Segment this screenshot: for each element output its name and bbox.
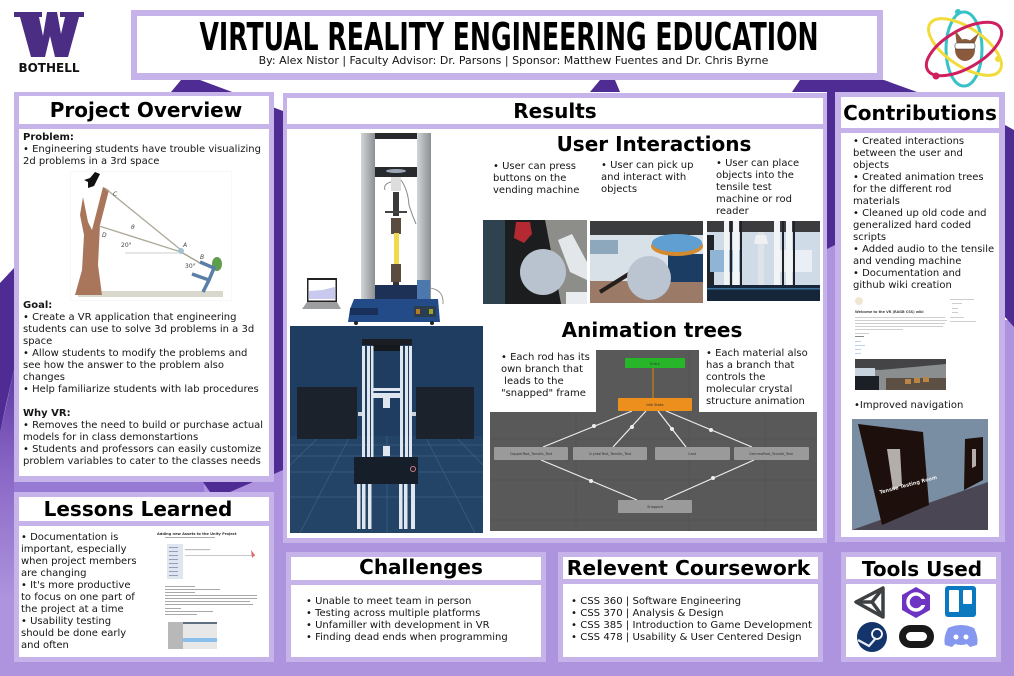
- diagram: animator state machine: GammaRod_Tensile_Test: [749, 452, 794, 456]
- panel: lessons learned: [14, 492, 274, 662]
- photo: pressing vending button: [483, 220, 587, 304]
- figure: tree statics problem: C: [113, 191, 118, 198]
- text: user can pick up: • User can pick up and interact with objects: [601, 160, 693, 195]
- screenshot: github wiki: [855, 297, 976, 390]
- text: goal: Goal: • Create a VR application that engineering students can use to solve 3d problems in a 3d space • Allow students to modify the problems and see how the answer to the problem also changes • Help familiarize students with lab procedures: [23, 300, 259, 395]
- icon: steam: [857, 622, 887, 652]
- title panel: [131, 10, 883, 80]
- text: each material: • Each material also has a branch that controls the molecular crystal structure animation: [706, 348, 808, 407]
- logo: atom bunny: [924, 9, 1004, 88]
- figure: tree statics problem: 20°: [121, 242, 132, 249]
- heading: results: Results: [513, 99, 597, 123]
- diagram: animator state machine: Idle State: [646, 403, 664, 407]
- heading: challenges: [291, 557, 541, 580]
- heading: contributions: Contributions: [843, 101, 997, 125]
- text: user can place objects: • User can place objects into the tensile test machine or rod reader: [716, 158, 799, 217]
- figure: tree statics problem: A: [182, 242, 187, 249]
- text: user can press buttons: • User can press buttons on the vending machine: [493, 161, 579, 196]
- diagram: animator state machine: Entry: [650, 362, 661, 366]
- text: each rod: • Each rod has its own branch that leads to the "snapped" frame: [501, 352, 590, 399]
- icon: W mark: [14, 12, 84, 57]
- screenshot: 3D machine model: [290, 326, 483, 533]
- panel: project overview: [14, 92, 274, 482]
- panel: contributions: [835, 92, 1005, 542]
- heading: project overview: [19, 96, 269, 124]
- heading: lessons learned: Lessons Learned: [44, 497, 232, 521]
- text: lessons: • Documentation is important, especially when project members are changing • It's more productive to focus on one part of the project at a time • Usability testing should be done early and often: [21, 532, 137, 651]
- figure: tree statics problem: [75, 172, 223, 297]
- text: contribution list: • Created interactions between the user and objects • Created animation trees for the different rod materials • Cleaned up old code and generalized hard coded scripts • Added audio to the tensile and vending machine • Documentation and github wiki creation: [853, 136, 994, 291]
- text: why VR: Why VR: • Removes the need to build or purchase actual models for in class demonstartions • Students and professors can easily customize problem variables to cater to the classes needs: [23, 408, 263, 467]
- figure: tree statics problem: B: [200, 254, 204, 261]
- text: problem: Problem: • Engineering students have trouble visualizing 2d problems in a 3rd space: [23, 132, 261, 167]
- diagram: animator state machine: [490, 350, 817, 531]
- logo wordmark: BOTHELL: [18, 61, 80, 75]
- subtitle: credits: By: Alex Nistor | Faculty Advisor: Dr. Parsons | Sponsor: Matthew Fuentes and Dr. Chris Byrne: [259, 54, 768, 67]
- heading: animation trees: Animation trees: [562, 318, 742, 342]
- text: challenges list: • Unable to meet team in person • Testing across multiple platforms • Unfamiller with development in VR • Finding dead ends when programming: [306, 596, 508, 643]
- figure: tree statics problem: D: [102, 232, 107, 239]
- screenshot: tensile testing room door: [852, 419, 988, 530]
- logo: UW Bothell: [14, 12, 84, 75]
- panel: relevent coursework: [558, 552, 823, 662]
- icon: C sharp: [902, 587, 930, 618]
- icon: unity: [856, 588, 883, 617]
- title: VIRTUAL REALITY ENGINEERING EDUCATION: [199, 15, 819, 59]
- heading: challenges: Challenges: [359, 555, 483, 579]
- text: coursework list: • CSS 360 | Software Engineering • CSS 370 | Analysis & Design • CSS 385 | Introduction to Game Development • CSS 478 | Usability & User Centered Design: [571, 596, 812, 643]
- photo: tensile test machine: [302, 133, 444, 325]
- panel: challenges: [286, 552, 546, 662]
- screenshot: github wiki: Welcome to the VR (RAGB CSS) wiki: [855, 310, 924, 314]
- icons: tool logos: [854, 586, 978, 652]
- screenshot: documentation page: [157, 532, 257, 649]
- icon: oculus: [902, 628, 930, 644]
- heading: results: [287, 98, 823, 124]
- heading: user interactions: User Interactions: [557, 132, 751, 156]
- panel: tools used: [841, 552, 1001, 662]
- heading: project overview: Project Overview: [50, 98, 242, 122]
- screenshot: documentation page: Adding new Assets to the Unity Project: [157, 532, 237, 536]
- diagram: animator state machine: CopperRod_Tensile_Test: [510, 452, 553, 456]
- diagram: animator state machine: Cast: [688, 452, 697, 456]
- screenshot: tensile testing room door: Tensile Testing Room: [879, 475, 938, 496]
- figure: tree statics problem: θ: [131, 224, 135, 231]
- photo: picking up object: [590, 221, 703, 303]
- icon: trello: [945, 586, 976, 617]
- icon: discord: [944, 625, 978, 647]
- diagram: animator state machine: Snapped: [647, 505, 663, 509]
- photo: placing object in machine: [707, 221, 820, 301]
- diagram: animator state machine: CrystalTest_Tensile_Test: [589, 452, 632, 456]
- heading: relevent coursework: Relevent Coursework: [567, 556, 810, 580]
- text: improved navigation: •Improved navigation: [854, 400, 963, 411]
- heading: tools used: Tools Used: [862, 557, 982, 581]
- panel: results: [283, 93, 827, 543]
- figure: tree statics problem: 30°: [185, 263, 196, 270]
